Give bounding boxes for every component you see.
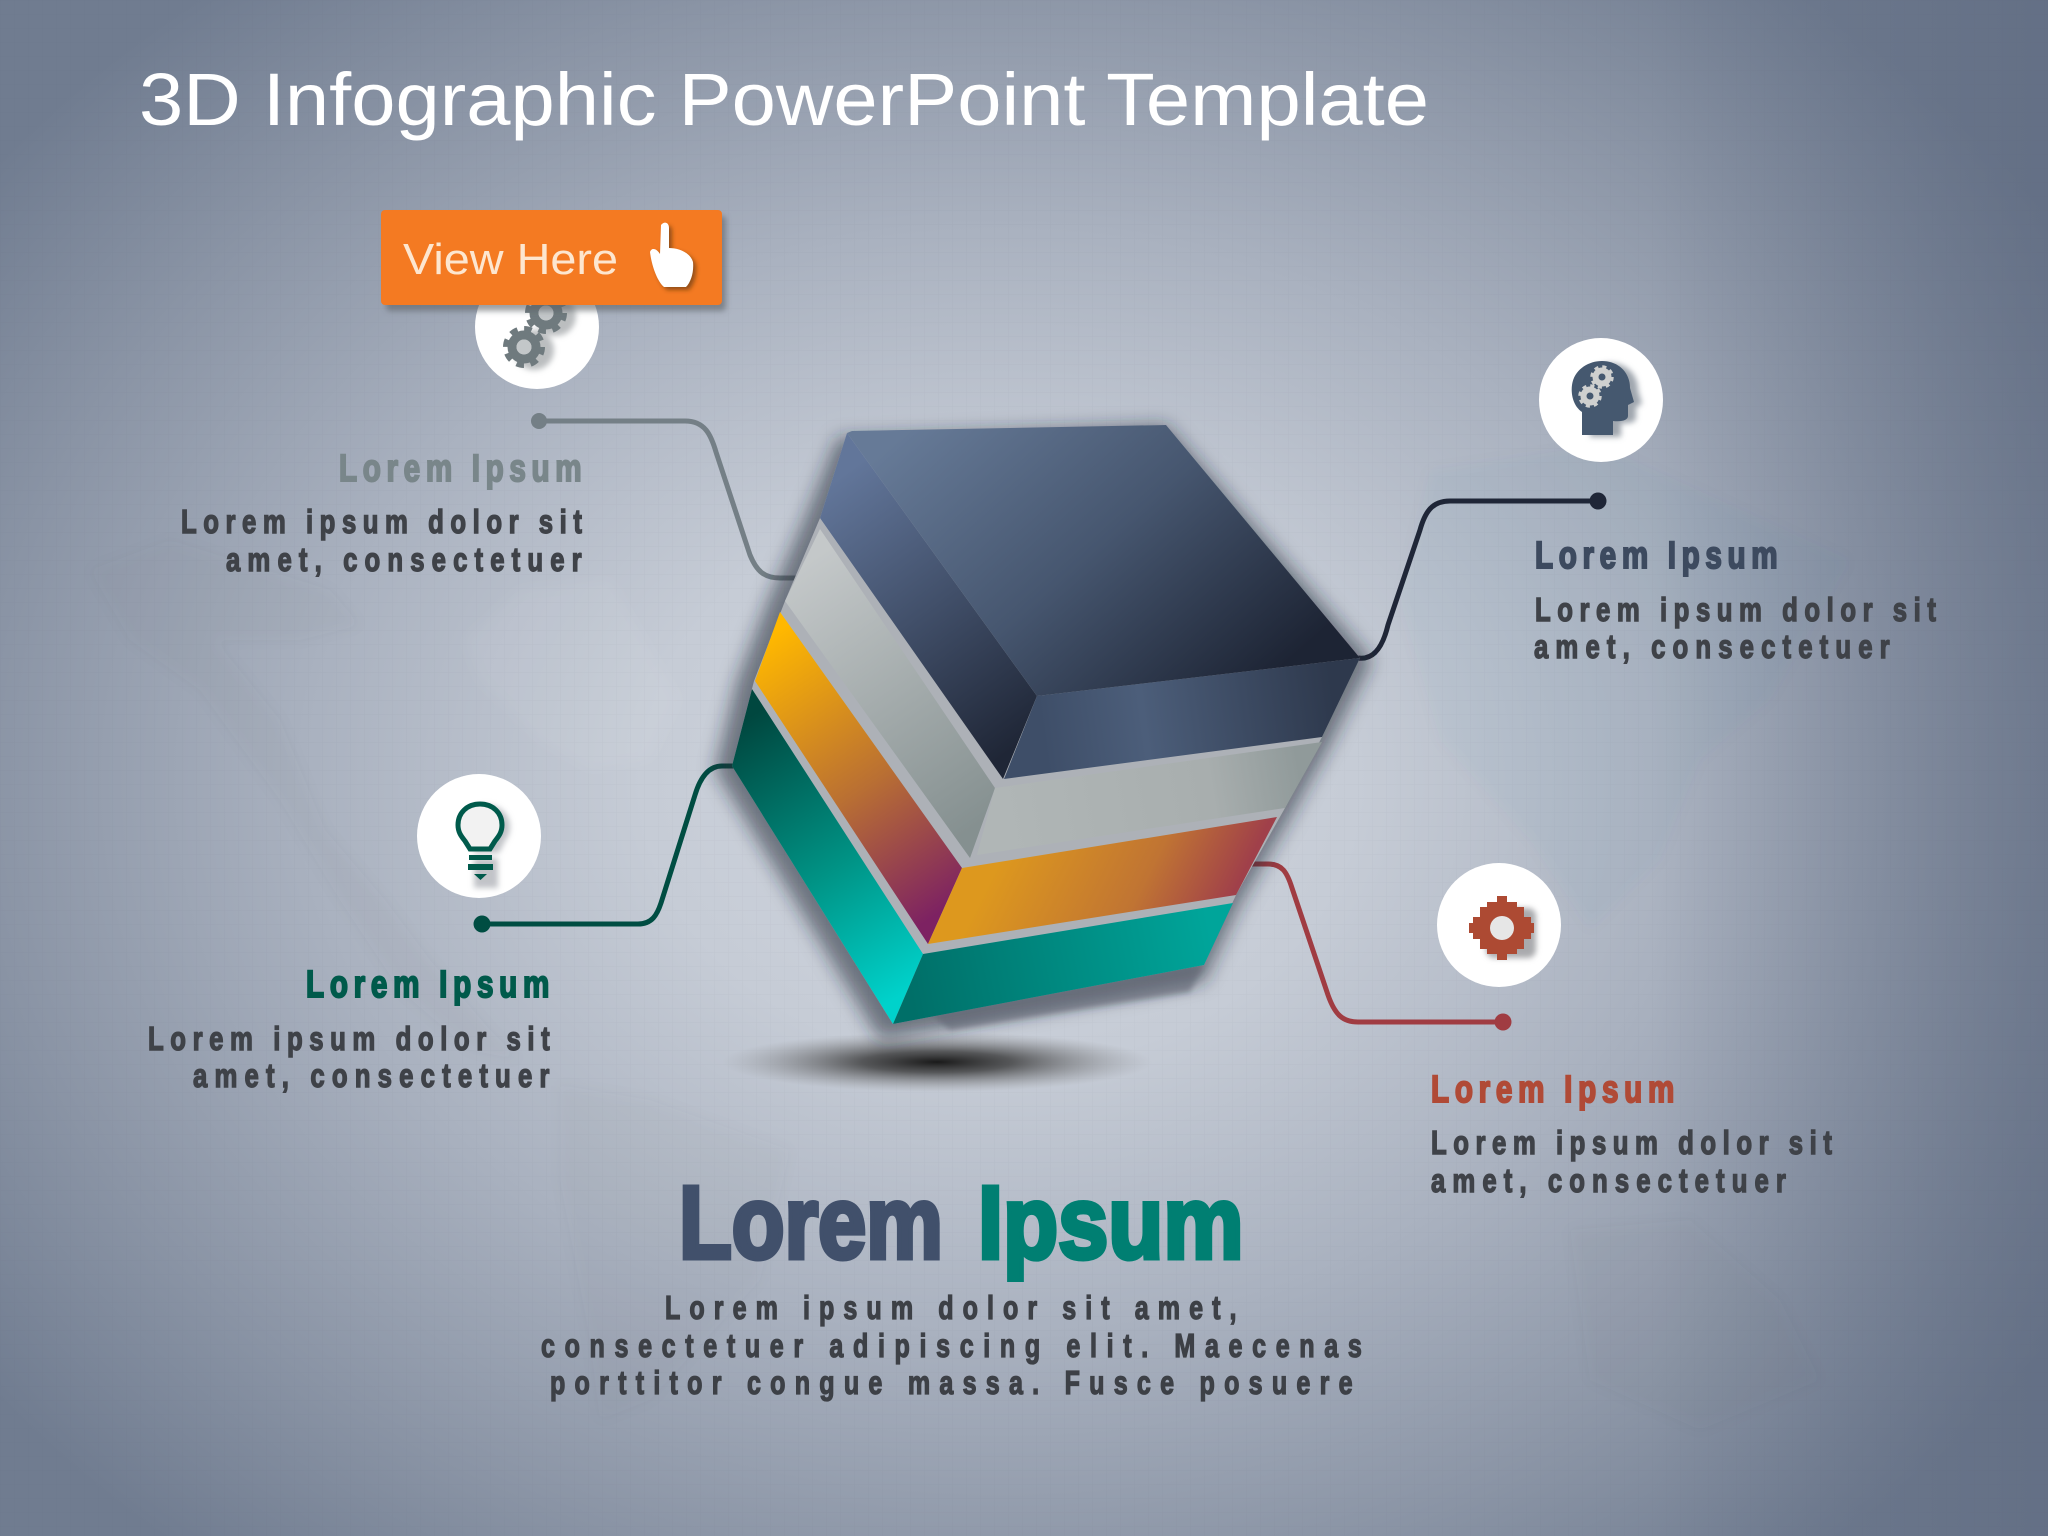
title: 3D Infographic PowerPoint Template	[139, 58, 1429, 141]
text block: amet, consectetuer	[1431, 1163, 1786, 1200]
text block: Lorem ipsum dolor sit	[1431, 1125, 1832, 1162]
main heading: Ipsum	[978, 1165, 1244, 1280]
icon: pointing hand	[650, 223, 696, 290]
text block: Lorem ipsum dolor sit	[148, 1021, 550, 1058]
floor shadow	[722, 1032, 1152, 1092]
main heading: Lorem	[679, 1165, 943, 1280]
main text block	[541, 1290, 1362, 1402]
layer: orange	[755, 612, 1277, 944]
text block	[181, 504, 582, 579]
heading: Lorem Ipsum	[1535, 535, 1778, 577]
panel: grey item	[181, 265, 599, 579]
main heading	[679, 1165, 1244, 1280]
world map backdrop	[90, 445, 1850, 1430]
heading: Lorem Ipsum	[306, 964, 549, 1006]
layer: navy	[820, 425, 1360, 779]
button: view here	[381, 210, 726, 311]
text block: Lorem ipsum dolor sit	[181, 504, 582, 541]
panel: green item	[148, 774, 550, 1095]
icon circle: gear	[1437, 863, 1561, 987]
main text block: consectetuer adipiscing elit. Maecenas	[541, 1328, 1362, 1365]
connector: red	[1247, 864, 1512, 1030]
text block: amet, consectetuer	[1534, 629, 1890, 666]
text block	[1534, 592, 1936, 666]
icon circle: head with gears	[1539, 338, 1663, 462]
text block: Lorem ipsum dolor sit	[1535, 592, 1936, 629]
panel: red item	[1431, 863, 1832, 1200]
connector: navy	[1358, 492, 1606, 658]
3D stacked cube	[715, 425, 1372, 1040]
connector: grey	[531, 413, 797, 578]
icon circle: light bulb	[417, 774, 541, 898]
text block	[1431, 1125, 1832, 1200]
main text block: Lorem ipsum dolor sit amet,	[665, 1290, 1237, 1327]
layer: grey	[785, 529, 1322, 858]
layer: teal	[732, 689, 1233, 1024]
main text block: porttitor congue massa. Fusce posuere	[550, 1365, 1353, 1402]
heading: Lorem Ipsum	[1431, 1069, 1674, 1111]
text block	[148, 1021, 550, 1095]
connector: green	[474, 766, 738, 932]
text block: amet, consectetuer	[193, 1058, 550, 1095]
heading: Lorem Ipsum	[339, 448, 582, 490]
text block: amet, consectetuer	[226, 542, 582, 579]
panel: navy item	[1534, 338, 1936, 666]
button: view here: View Here	[403, 235, 618, 284]
icon circle: gears	[475, 265, 599, 389]
